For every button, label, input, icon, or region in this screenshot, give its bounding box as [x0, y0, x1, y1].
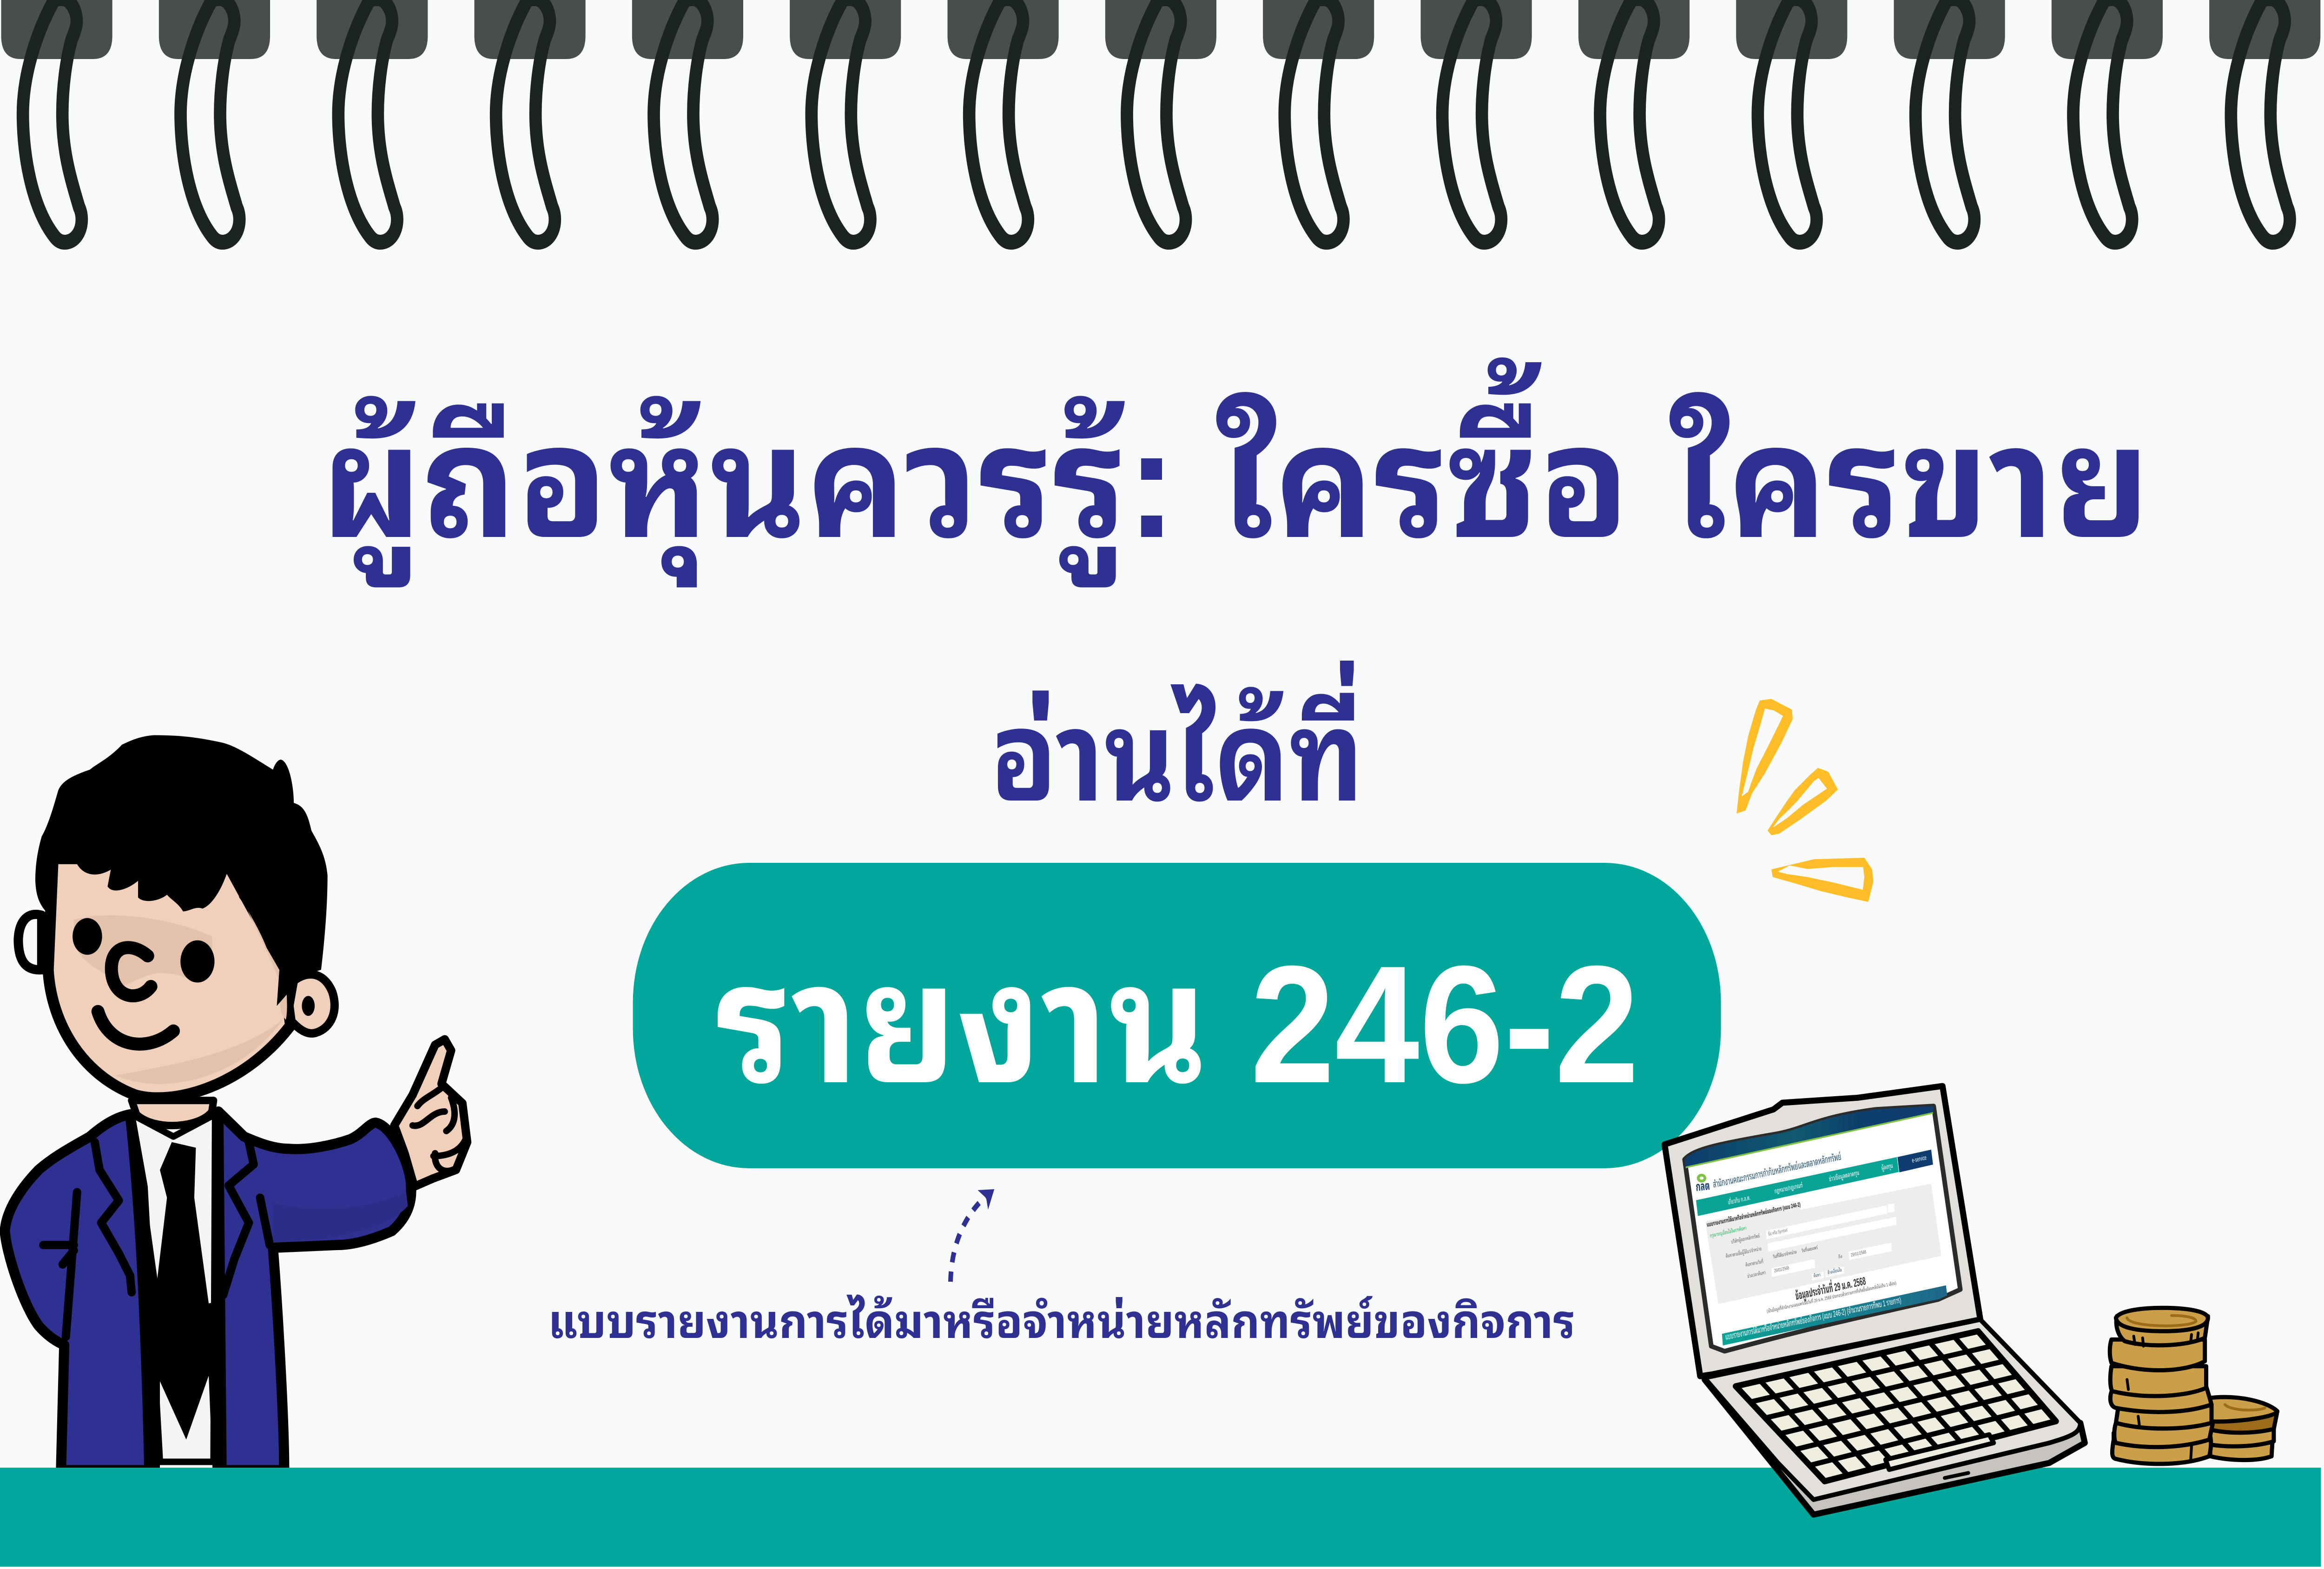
- space bar: [1886, 1435, 1994, 1470]
- website text labels: วันที่ได้มา/จำหน่าย: [1772, 1248, 1797, 1259]
- screen: [1684, 1106, 1961, 1351]
- nose: [112, 947, 151, 996]
- laptop lid: [1664, 1086, 1981, 1376]
- neck: [132, 1100, 213, 1125]
- jacket left side: [5, 1114, 149, 1470]
- website text labels: เกี่ยวกับ ก.ล.ต.: [1727, 1192, 1751, 1206]
- logo mark: [1698, 1175, 1705, 1181]
- website text labels: ช่วงเวลาค้นหา: [1747, 1269, 1766, 1279]
- hair: [35, 735, 328, 1006]
- result band: [1722, 1285, 1948, 1345]
- arrow: dotted pointer to pill: [951, 1189, 994, 1282]
- form inputs: [1766, 1204, 1896, 1280]
- left ear: [18, 914, 42, 970]
- website text labels: ข่าว/ข้อมูลตลาดทุน: [1829, 1169, 1860, 1183]
- spiral binding rings: [1, 0, 2320, 242]
- website text labels: 29/01/2568: [1774, 1265, 1789, 1273]
- icon: yellow spark marks: [1736, 699, 1874, 902]
- search form panel: [1705, 1184, 1941, 1304]
- shirt: [132, 1114, 215, 1462]
- illustration: laptop showing SEC website: [1664, 1086, 2085, 1515]
- mouth: [98, 1012, 173, 1044]
- site nav bar: [1696, 1157, 1899, 1216]
- face shading: [74, 887, 287, 1084]
- website text labels: ถึง: [1838, 1254, 1842, 1259]
- website text labels: ชื่อ หรือ Symbol: [1768, 1226, 1788, 1237]
- illustration: businessman pointing: [5, 735, 467, 1470]
- e-service button: [1897, 1150, 1933, 1172]
- website text labels: กรุณาระบุเงื่อนไขในการค้นหา: [1709, 1224, 1747, 1239]
- right ear: [287, 974, 335, 1033]
- website text labels: (เป็นข้อมูลที่สำนักงานเผยแพร่เมื่อวันที่ 29 ม.ค. 2568 ประกอบด้วยรายการที่เกิดขึ้นย้อนหลังไม่เกิน 1 เดือน): [1766, 1279, 1897, 1314]
- website text labels: 29/01/2568: [1850, 1249, 1867, 1258]
- website text labels: แบบรายงานการได้มาหรือจำหน่ายหลักทรัพย์ของกิจการ (แบบ 246-2): [1706, 1200, 1801, 1228]
- caption: full form name: แบบรายงานการได้มาหรือจำหน่ายหลักทรัพย์ของกิจการ: [548, 1295, 1575, 1348]
- button: report name pill: [633, 863, 1721, 1168]
- website text labels: [1696, 1151, 1927, 1342]
- website mockup: [1681, 1103, 1948, 1345]
- website text labels: ข้อมูลประจำวันที่ 29 ม.ค. 2568: [1794, 1272, 1867, 1303]
- website text labels: ล้างเงื่อนไข: [1827, 1266, 1842, 1275]
- website text labels: แบบรายงานการได้มาหรือจำหน่ายหลักทรัพย์ของกิจการ (แบบ 246-2) (จำนวนรายการที่พบ 1 รายการ): [1724, 1294, 1901, 1342]
- website text labels: ค้นหาตามชื่อผู้ได้มา/จำหน่าย: [1725, 1245, 1762, 1260]
- jacket right side and arm: [218, 1112, 411, 1470]
- hand: [394, 1039, 467, 1186]
- laptop base side: [1704, 1380, 2085, 1515]
- eyes: [73, 918, 102, 955]
- website text labels: วันที่เผยแพร่: [1801, 1244, 1818, 1253]
- website text labels: ค้นหาตามวันที่: [1745, 1258, 1764, 1268]
- bottom teal bar: [0, 1468, 2321, 1567]
- head: [48, 859, 290, 1098]
- website text labels: ค้นหา: [1813, 1272, 1821, 1278]
- website text labels: กลต: [1696, 1179, 1710, 1194]
- website text labels: สำนักงานคณะกรรมการกำกับหลักทรัพย์และตลาดหลักทรัพย์: [1712, 1151, 1842, 1190]
- main coin stack: [2110, 1308, 2213, 1464]
- laptop base top: [1704, 1319, 2080, 1500]
- arm shading: [273, 1192, 408, 1242]
- small coin stack: [2210, 1397, 2278, 1460]
- tie and vest: [145, 1142, 222, 1470]
- keyboard: [1736, 1331, 2056, 1481]
- website text labels: e-service: [1911, 1153, 1927, 1164]
- trackpad notch: [1945, 1473, 1968, 1478]
- website text labels: ผู้ลงทุน: [1881, 1162, 1894, 1172]
- lapels and folds: [43, 1142, 270, 1337]
- website text labels: กฎหมาย/กฎเกณฑ์: [1774, 1181, 1803, 1195]
- title: ผู้ถือหุ้นควรรู้: ใครซื้อ ใครขาย: [321, 357, 2151, 588]
- site header band: [1681, 1103, 1933, 1169]
- pill label: รายงาน 246-2: [716, 931, 1639, 1118]
- subheading: อ่านได้ที่: [990, 660, 1364, 828]
- illustration: stacked gold coins: [2110, 1308, 2278, 1464]
- website text labels: บริษัทผู้ออกหลักทรัพย์: [1731, 1233, 1760, 1245]
